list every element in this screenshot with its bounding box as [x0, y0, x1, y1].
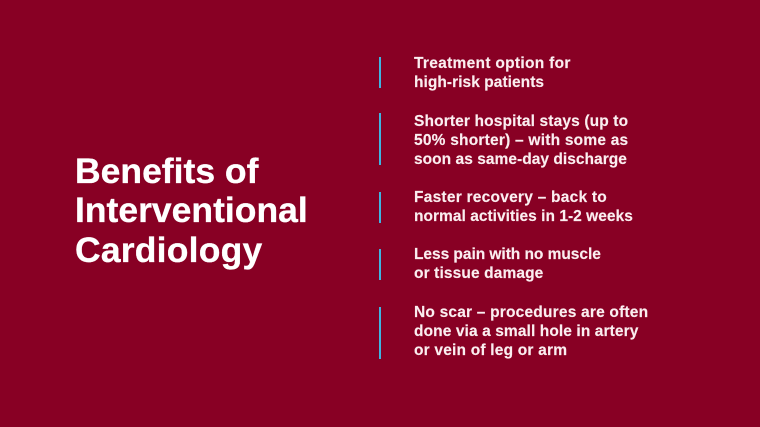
benefit 3 text: Faster recovery – back to — [414, 189, 607, 206]
benefit 5 text: or vein of leg or arm — [414, 342, 567, 359]
benefit 2 text — [414, 113, 628, 168]
accent bar 1 — [379, 57, 381, 88]
benefit 5 text: No scar – procedures are often — [414, 304, 648, 321]
benefit 2 text: Shorter hospital stays (up to — [414, 113, 628, 130]
benefit 4 text: Less pain with no muscle — [414, 246, 601, 263]
accent bar 5 — [379, 307, 381, 359]
title: Interventional — [75, 190, 308, 230]
benefit 1 text: Treatment option for — [414, 55, 571, 72]
benefit 4 text: or tissue damage — [414, 265, 543, 282]
benefit 1 text — [414, 55, 571, 91]
benefit 3 text: normal activities in 1-2 weeks — [414, 208, 633, 225]
benefit 2 text: soon as same-day discharge — [414, 151, 627, 168]
benefit 4 text — [414, 246, 601, 282]
title: Benefits of — [75, 150, 258, 190]
title: Cardiology — [75, 230, 262, 270]
benefit 2 text: 50% shorter) – with some as — [414, 132, 628, 149]
benefit 1 text: high-risk patients — [414, 74, 544, 91]
accent bar 3 — [379, 192, 381, 223]
benefit 5 text — [414, 304, 648, 359]
accent bar 2 — [379, 113, 381, 165]
benefit 5 text: done via a small hole in artery — [414, 323, 638, 340]
accent bar 4 — [379, 249, 381, 280]
title — [75, 150, 308, 270]
benefit 3 text — [414, 189, 633, 225]
